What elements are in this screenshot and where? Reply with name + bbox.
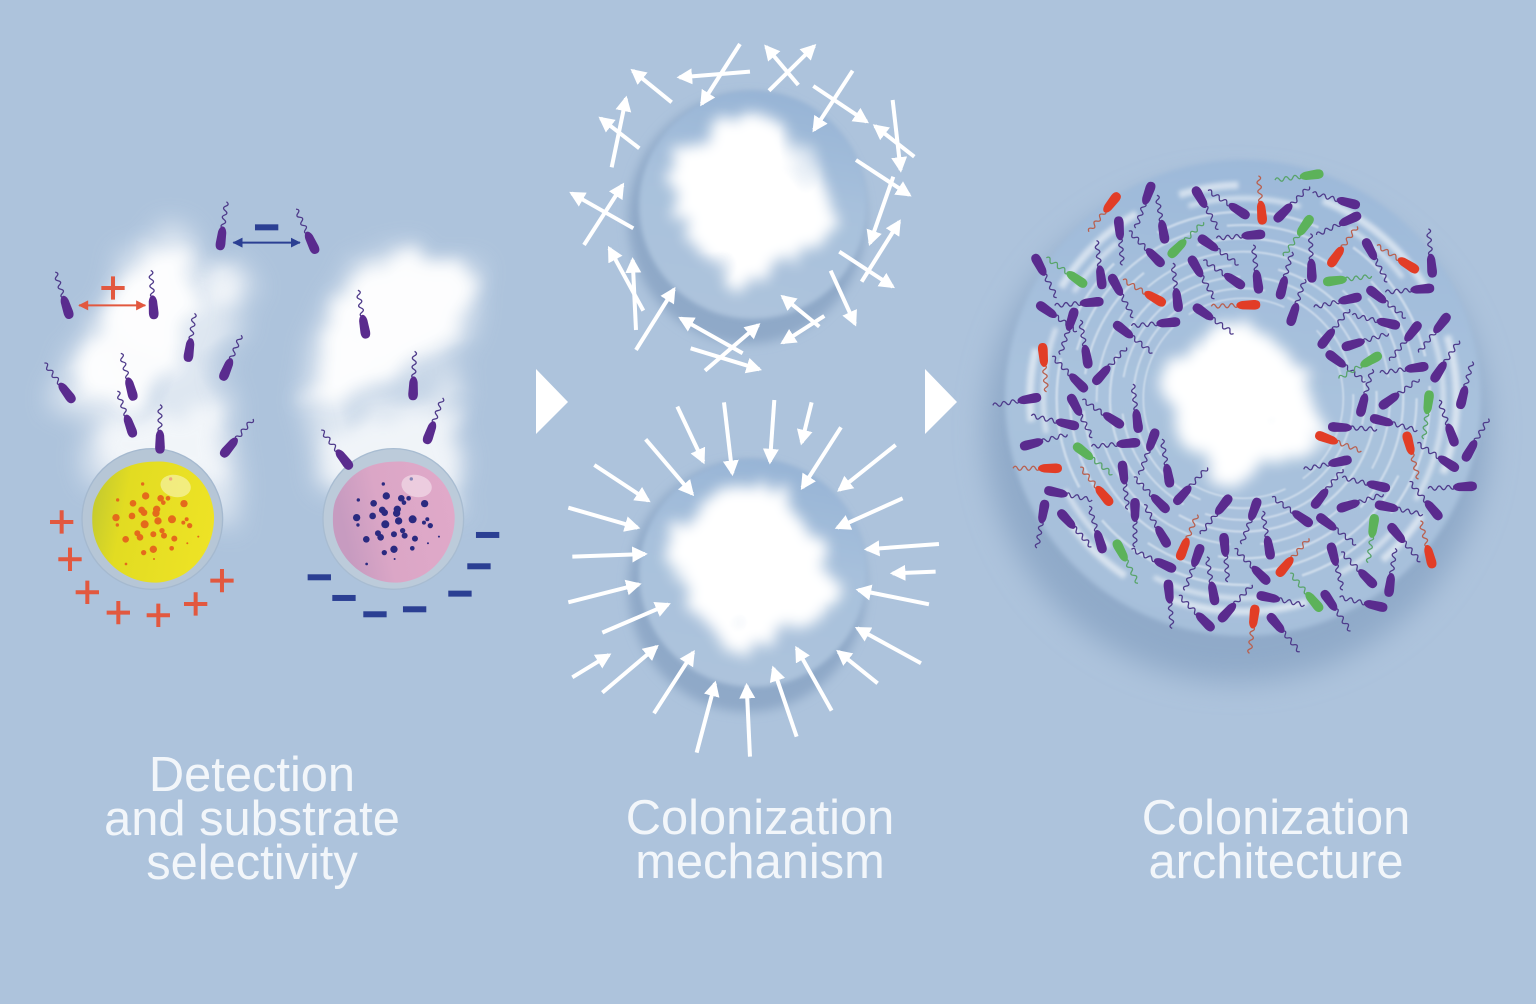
arrow: step one to step two bbox=[536, 369, 568, 434]
heading: colonization mechanism: mechanism bbox=[635, 835, 885, 889]
heading: detection and substrate selectivity: Detection bbox=[149, 748, 355, 802]
heading: colonization architecture: Colonization bbox=[1142, 791, 1410, 845]
panel: detection and substrate selectivity bbox=[41, 201, 499, 890]
panel: colonization architecture bbox=[985, 160, 1493, 889]
attraction arrow with plus sign bbox=[79, 276, 145, 305]
cloud: positive substrate biofilm bbox=[57, 233, 250, 523]
large biofilm disc bbox=[985, 160, 1489, 682]
heading: colonization mechanism: Colonization bbox=[626, 791, 894, 845]
heading: colonization architecture: architecture bbox=[1149, 835, 1403, 889]
heading: detection and substrate selectivity: selectivity bbox=[146, 836, 358, 890]
substrate cell: yellow positive bbox=[82, 449, 223, 589]
bottom disc with cloud bbox=[628, 459, 867, 712]
cloud: negative substrate biofilm bbox=[290, 247, 480, 523]
arrow: step two to step three bbox=[925, 369, 957, 434]
positive charges around yellow cell bbox=[50, 510, 234, 627]
heading: detection and substrate selectivity: and substrate bbox=[104, 792, 400, 846]
repulsion arrow with minus sign bbox=[233, 224, 300, 243]
substrate cell: pink negative bbox=[323, 449, 464, 589]
bacteria swimming toward the substrates bbox=[41, 201, 447, 472]
top disc random outward arrows bbox=[572, 44, 914, 371]
negative charges around pink cell bbox=[308, 532, 499, 617]
bottom disc inward arrows bbox=[568, 400, 939, 757]
colony of purple, red and green bacteria bbox=[992, 169, 1493, 655]
panel: colonization mechanism bbox=[568, 44, 939, 889]
top disc with cloud bbox=[628, 91, 867, 344]
